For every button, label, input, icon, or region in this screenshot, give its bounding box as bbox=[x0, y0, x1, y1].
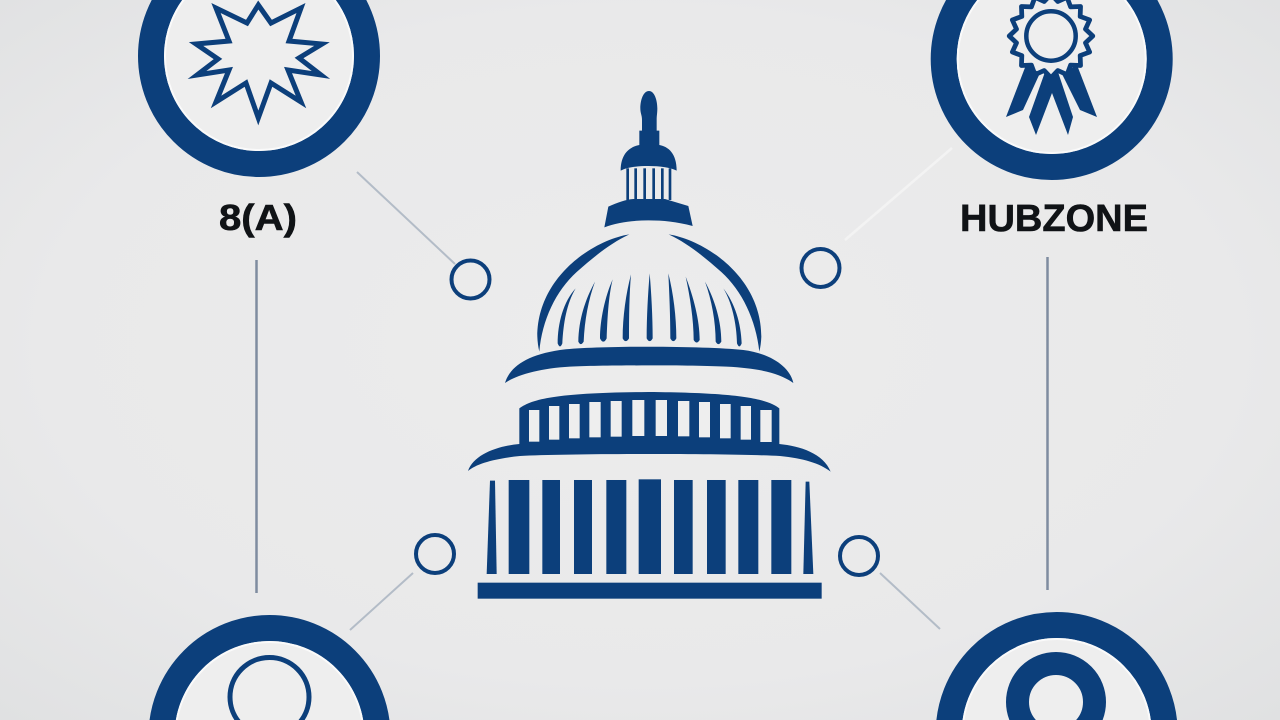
connector line: top-right diagonal bbox=[845, 148, 952, 240]
icon: person head outline bbox=[230, 658, 309, 720]
connector line: HUBZone vertical bbox=[1046, 257, 1049, 590]
dome outline arcs bbox=[537, 234, 629, 352]
connector line: 8(A) vertical bbox=[255, 260, 258, 593]
node: top-left bbox=[452, 260, 490, 298]
base plinth bbox=[478, 583, 822, 599]
statue and lantern cap bbox=[621, 91, 677, 171]
icon: ribbon loop bbox=[1018, 664, 1094, 720]
lantern columns bbox=[628, 168, 670, 200]
node: bottom-left bbox=[416, 535, 454, 573]
colonnade bbox=[487, 479, 813, 574]
connector line: top-left diagonal bbox=[357, 172, 455, 264]
connector line: bottom-left diagonal bbox=[350, 573, 413, 630]
dome and lantern bbox=[505, 91, 793, 383]
drum windows bbox=[529, 400, 772, 442]
node: bottom-right bbox=[840, 537, 878, 575]
drum with flared cornice bbox=[468, 392, 831, 472]
label: HUBZONE: HUBZONE bbox=[960, 198, 1148, 240]
drum and colonnade bbox=[468, 392, 831, 599]
badge: bottom-right ribbon bbox=[949, 625, 1165, 720]
icon: star burst bbox=[196, 5, 322, 118]
icon: rosette ribbon bbox=[1006, 0, 1097, 135]
connector line: bottom-right diagonal bbox=[880, 573, 940, 629]
label: 8(A): 8(A) bbox=[219, 197, 297, 238]
icon: Capitol building bbox=[468, 91, 831, 599]
node: top-right bbox=[802, 249, 840, 287]
badge: HUBZone rosette bbox=[944, 0, 1160, 167]
dome cornice bbox=[505, 347, 793, 383]
badge: 8(A) star bbox=[151, 0, 367, 164]
dome ribs bbox=[558, 273, 742, 346]
badge: bottom-left person bbox=[162, 628, 378, 720]
lantern base bbox=[604, 199, 693, 227]
